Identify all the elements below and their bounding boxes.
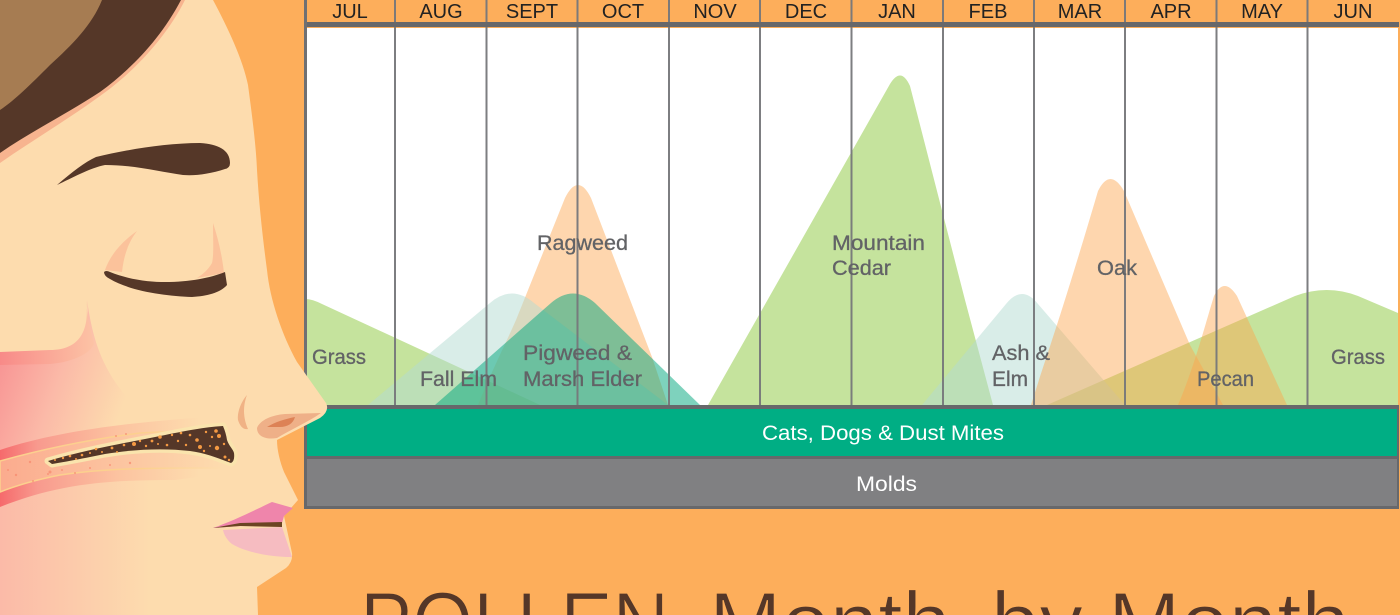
- lower face flush: [0, 480, 150, 615]
- month labels: MAR: [1058, 1, 1102, 23]
- upper lip: [213, 502, 293, 528]
- eyelid shadow left: [105, 231, 137, 272]
- area: oak: [1031, 179, 1223, 405]
- nasal passage outer: [0, 416, 235, 507]
- pollen labels: Ash &: [992, 342, 1050, 365]
- month grid lines: [395, 0, 1308, 405]
- pollen labels: Pecan: [1197, 368, 1254, 391]
- month labels: JUN: [1334, 1, 1372, 23]
- area: pecan: [1178, 286, 1287, 405]
- area: mountain cedar: [708, 75, 993, 405]
- lower lip: [223, 527, 292, 557]
- cheek crease: [0, 300, 94, 365]
- pollen labels: Pigweed &: [523, 342, 632, 365]
- plot area: [306, 28, 1398, 405]
- pollen labels: Cedar: [832, 257, 891, 280]
- hair dark band: [0, 0, 181, 153]
- pollen labels: Elm: [992, 368, 1028, 391]
- pollen labels: Grass: [1331, 346, 1385, 369]
- eyelid shadow right: [197, 223, 224, 278]
- month labels: NOV: [693, 1, 737, 23]
- area: ash and elm: [922, 294, 1125, 405]
- inflamed cheek: [0, 300, 225, 482]
- month labels: JAN: [878, 1, 916, 23]
- hair shadow: [0, 0, 185, 163]
- area: grass (summer): [306, 299, 540, 405]
- eyebrow: [57, 143, 230, 185]
- nostril wing crease: [238, 395, 248, 429]
- pollen specks: [54, 429, 230, 461]
- month labels: OCT: [602, 1, 644, 23]
- face skin: [0, 0, 327, 615]
- pollen labels: Ragweed: [537, 232, 628, 255]
- face illustration: [0, 0, 327, 615]
- pollen labels: Fall Elm: [420, 368, 497, 391]
- month labels: [332, 1, 1372, 23]
- mouth line: [213, 522, 282, 528]
- month labels: FEB: [969, 1, 1007, 23]
- nasal passage inner: [0, 428, 236, 492]
- pollen labels: Oak: [1097, 257, 1138, 280]
- nostril: [257, 413, 321, 439]
- band: cats, dogs and dust mites: Cats, Dogs & Dust Mites: [762, 422, 1004, 445]
- pollen labels: [312, 232, 1385, 391]
- month labels: SEPT: [506, 1, 558, 23]
- month labels: DEC: [785, 1, 827, 23]
- month labels: JUL: [332, 1, 368, 23]
- mucus specks: [7, 433, 131, 482]
- area: grass (spring): [1047, 290, 1398, 405]
- pollen labels: Mountain: [832, 232, 925, 255]
- hair highlight: [0, 0, 102, 110]
- band: molds: [304, 456, 1399, 509]
- closed eye lash: [104, 271, 227, 297]
- month labels: MAY: [1241, 1, 1283, 23]
- month header rule: [304, 22, 1399, 27]
- band: cats, dogs and dust mites: [304, 405, 1399, 457]
- pollen labels: Marsh Elder: [523, 368, 642, 391]
- band: molds: Molds: [856, 473, 917, 496]
- area: pigweed and marsh elder: [435, 294, 700, 405]
- area: ragweed: [478, 185, 668, 405]
- pollen in nasal passage: [48, 426, 234, 464]
- nostril opening: [267, 417, 295, 427]
- month labels: APR: [1150, 1, 1192, 23]
- area: fall elm: [368, 294, 668, 405]
- chart: pollen calendar: [304, 0, 1399, 509]
- pollen labels: Grass: [312, 346, 366, 369]
- title: [360, 575, 1350, 615]
- month labels: AUG: [419, 1, 463, 23]
